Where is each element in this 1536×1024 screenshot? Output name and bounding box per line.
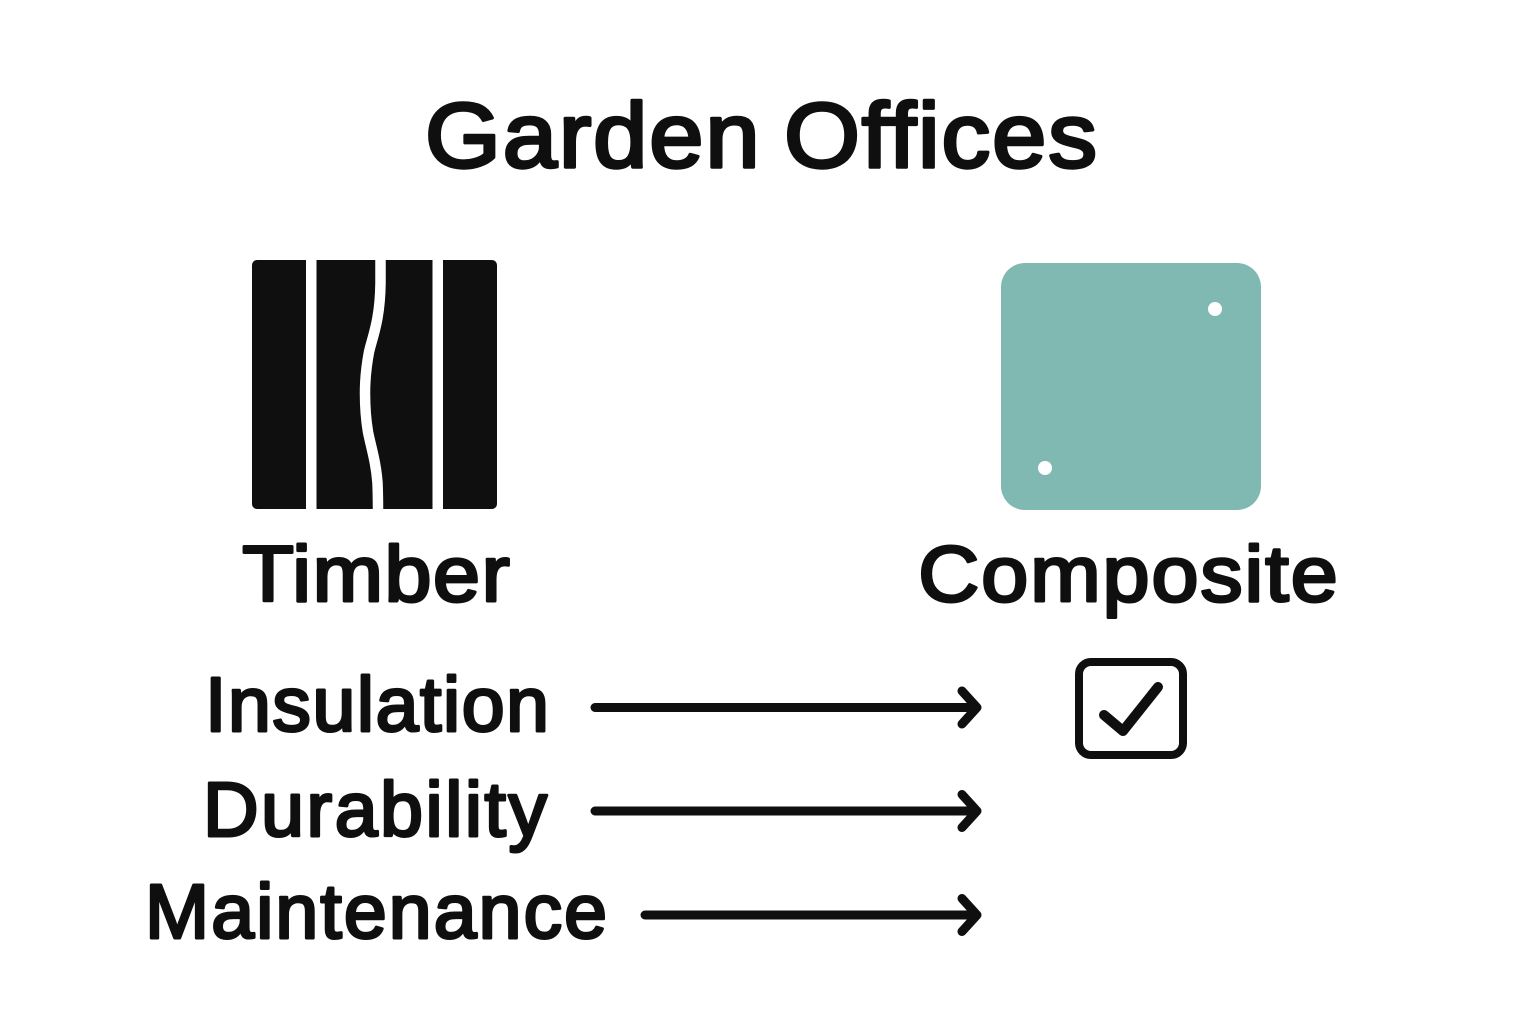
row: Maintenance: Maintenance [145,869,607,955]
label: Composite: Composite [918,531,1338,618]
icon: timber planks [252,258,497,511]
icon: checkbox [1079,662,1183,755]
row: Insulation [205,662,977,748]
arrow: Insulation [595,691,977,724]
icon: composite panel [1001,263,1261,510]
arrow: Maintenance [645,898,977,932]
row: Durability [203,767,977,853]
label: Timber: Timber [242,531,510,618]
row: Maintenance [145,869,977,955]
row: Insulation: Insulation [205,662,549,748]
title: Garden Offices [425,85,1097,187]
arrow: Durability [595,794,977,828]
row: Durability: Durability [203,767,548,853]
